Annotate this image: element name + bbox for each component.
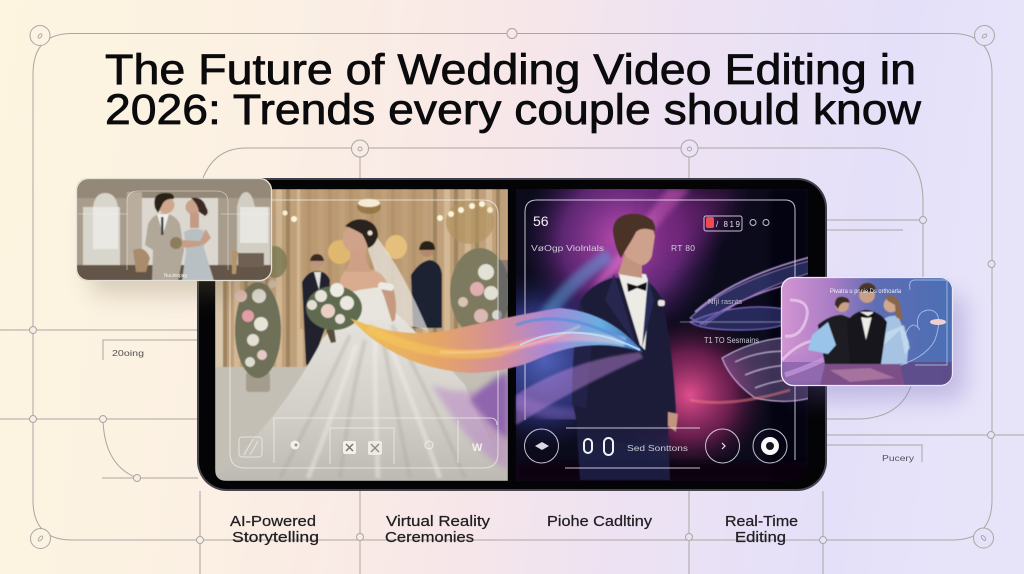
trio figures — [808, 283, 910, 386]
vignette corner swirl in dress — [432, 380, 508, 470]
glass swirl — [782, 298, 824, 378]
centre man — [847, 310, 887, 364]
left viewfinder overlay — [230, 200, 498, 468]
tablet — [197, 178, 827, 491]
right woman — [880, 316, 909, 364]
label: AI-Powered Storytelling: AI-Powered — [230, 513, 316, 530]
right viewfinder content: 56 — [533, 213, 549, 229]
chandeliers — [282, 199, 494, 264]
right card caption: Pivatra u pnnie Ds orthoarla — [830, 289, 902, 295]
groomsman left — [302, 254, 330, 365]
left woman — [818, 315, 856, 364]
right viewfinder content: Sed Sonttons — [627, 443, 688, 453]
floral stands — [133, 249, 150, 272]
label: Real-Time Editing: Real-Time — [725, 513, 798, 530]
side annotation: 20oing: 20oing — [112, 348, 144, 358]
right viewfinder content: T1 TO Sesmains — [704, 336, 759, 345]
right viewfinder content: / 819 — [716, 220, 741, 229]
veil — [368, 232, 428, 330]
label: Virtual Reality Ceremonies: Virtual Reality — [386, 513, 491, 530]
left controls — [290, 440, 483, 455]
title: 2026: Trends every couple should know — [105, 86, 922, 134]
light beam — [590, 189, 690, 290]
label: AI-Powered Storytelling — [230, 513, 319, 546]
inner rounded frame — [203, 148, 923, 277]
sequin floor — [820, 364, 905, 386]
flowing ribbon crossing screens — [350, 308, 643, 425]
label: Virtual Reality Ceremonies — [385, 513, 491, 546]
wedding dress — [244, 313, 480, 454]
right swirl upper — [680, 256, 820, 330]
right viewfinder content — [531, 213, 779, 455]
right viewfinder content: Nfjl rasnts — [708, 297, 742, 306]
vertical connectors — [200, 148, 823, 574]
bride head — [342, 227, 368, 251]
right connectors — [826, 220, 1024, 462]
label: Real-Time Editing: Editing — [735, 529, 786, 546]
groom — [572, 214, 678, 480]
right screen: cinematic galaxy — [516, 189, 820, 482]
bouquet — [170, 237, 182, 249]
right viewfinder overlay — [524, 200, 795, 468]
flower column left — [235, 246, 287, 392]
groom in beige suit — [145, 213, 184, 281]
tablet body — [197, 178, 827, 491]
label: Piohe Cadltiny: Piohe Cadltiny — [547, 513, 653, 530]
floating card: couple in white room — [76, 178, 272, 281]
left card overlay frame — [78, 191, 270, 270]
label: AI-Powered Storytelling: Storytelling — [232, 529, 319, 546]
left connectors — [0, 330, 198, 478]
label: Real-Time Editing — [725, 513, 798, 546]
right viewfinder content: RT 80 — [671, 243, 695, 253]
label: Virtual Reality Ceremonies: Ceremonies — [385, 529, 474, 546]
floating card shadows — [90, 200, 965, 400]
bride torso — [340, 270, 387, 292]
window left — [83, 193, 120, 265]
left controls: W — [472, 442, 483, 454]
officiant right — [411, 241, 442, 328]
floor — [76, 265, 272, 281]
side annotation: Pucery: Pucery — [882, 453, 915, 463]
bouquet — [306, 283, 362, 343]
right swirl lower — [690, 337, 820, 402]
title — [105, 46, 922, 134]
left card caption: Nuuinnpag — [164, 273, 187, 279]
window right — [237, 192, 270, 265]
flowers right — [450, 248, 508, 328]
curtains — [215, 189, 508, 374]
left screen: wedding ceremony — [215, 189, 510, 481]
centre wall — [142, 198, 218, 268]
title: The Future of Wedding Video Editing in — [105, 46, 916, 94]
right viewfinder content: VøOgp Violnlals — [531, 243, 604, 253]
floating card: trio on stage — [781, 277, 953, 386]
floor — [215, 367, 508, 481]
groom head — [623, 228, 656, 266]
bride — [182, 229, 214, 281]
